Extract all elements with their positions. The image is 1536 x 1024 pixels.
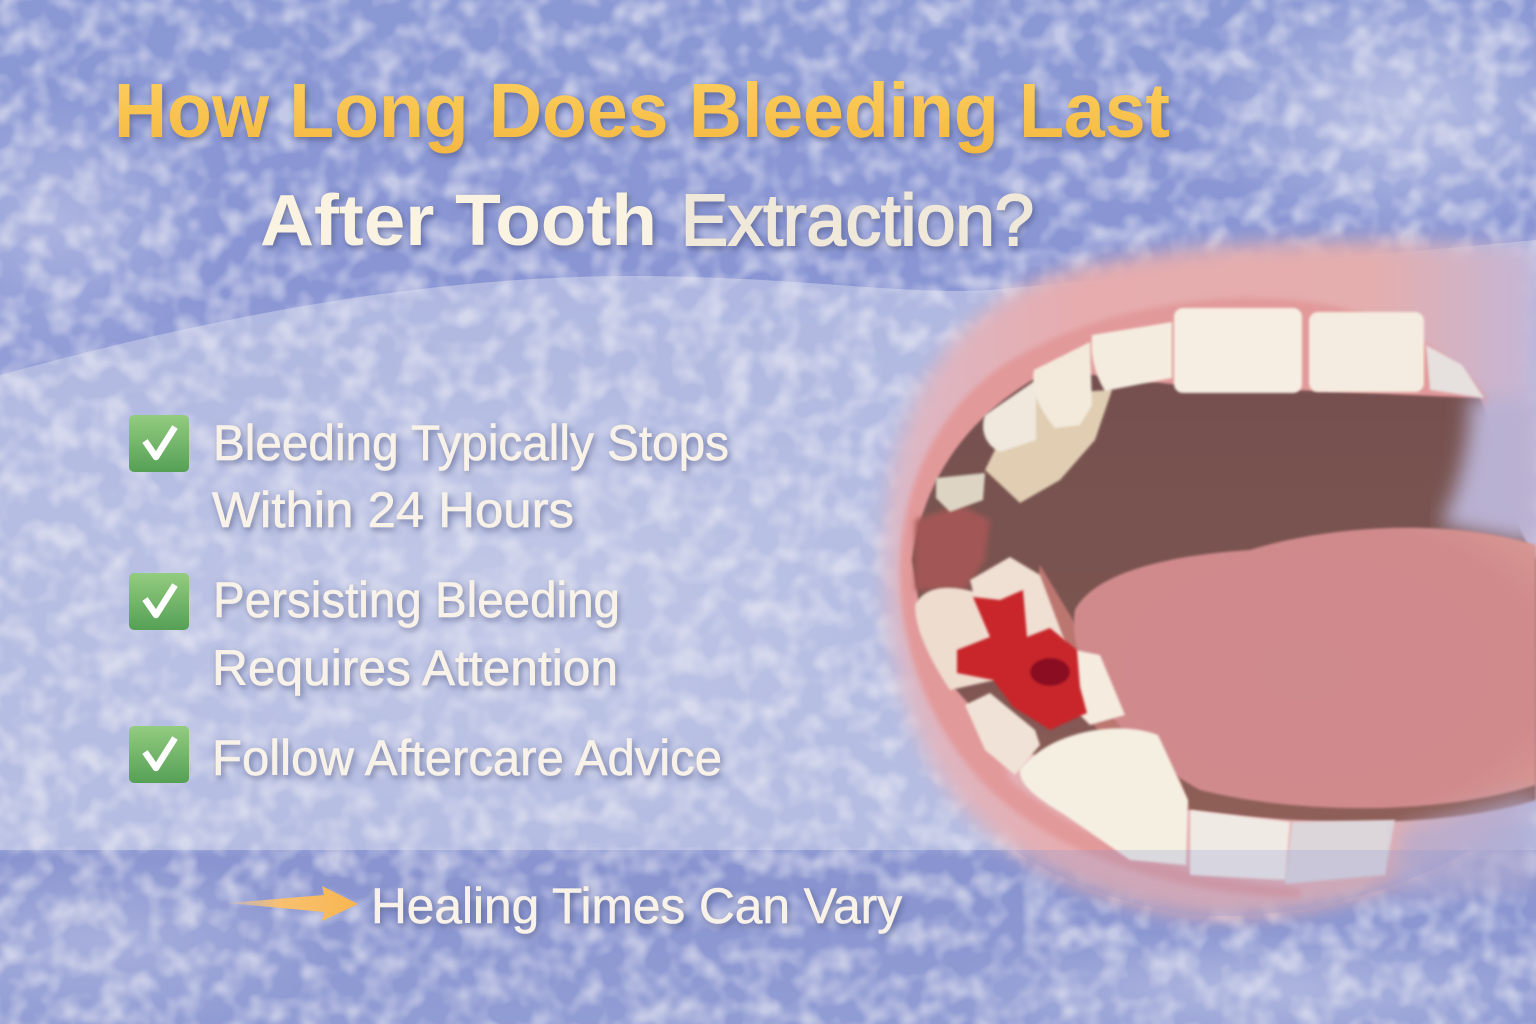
title line 2 — [260, 181, 1034, 261]
text: bleeding stops — [212, 415, 729, 538]
text: bleeding stops: Bleeding Typically Stops — [213, 415, 729, 471]
blood — [957, 590, 1087, 730]
title line 1: How Long Does Bleeding Last — [114, 68, 1170, 154]
lilac fade at lower right — [1400, 790, 1536, 900]
item 1 — [129, 415, 729, 538]
gum ridge beside molars — [1030, 565, 1190, 810]
footer note: Healing Times Can Vary — [371, 878, 902, 934]
title line 2: Extraction? — [681, 181, 1034, 261]
title — [114, 68, 1170, 261]
text: persisting bleeding — [212, 572, 620, 696]
lilac fade at right of cavity — [1440, 395, 1536, 545]
arrow — [228, 886, 358, 921]
text: persisting bleeding: Requires Attention — [212, 640, 618, 696]
mouth cavity — [912, 370, 1536, 822]
text: bleeding stops: Within 24 Hours — [212, 482, 574, 538]
tongue — [1074, 528, 1536, 808]
lower teeth — [915, 557, 1395, 884]
text: persisting bleeding: Persisting Bleeding — [213, 572, 620, 628]
icon: check mark — [129, 415, 189, 472]
text: follow aftercare: Follow Aftercare Advice — [212, 730, 722, 786]
gum tissue — [915, 505, 990, 590]
inner lip rim — [900, 298, 1490, 898]
title line 2: After Tooth — [260, 181, 657, 261]
bottom band tint over lip — [1014, 850, 1470, 916]
mouth illustration — [880, 242, 1536, 940]
checklist — [129, 415, 729, 786]
upper teeth — [936, 308, 1484, 512]
icon: check mark — [129, 726, 189, 783]
item 3 — [129, 726, 722, 786]
item 2 — [129, 572, 620, 696]
icon: check mark — [129, 573, 189, 630]
lips — [885, 242, 1536, 916]
